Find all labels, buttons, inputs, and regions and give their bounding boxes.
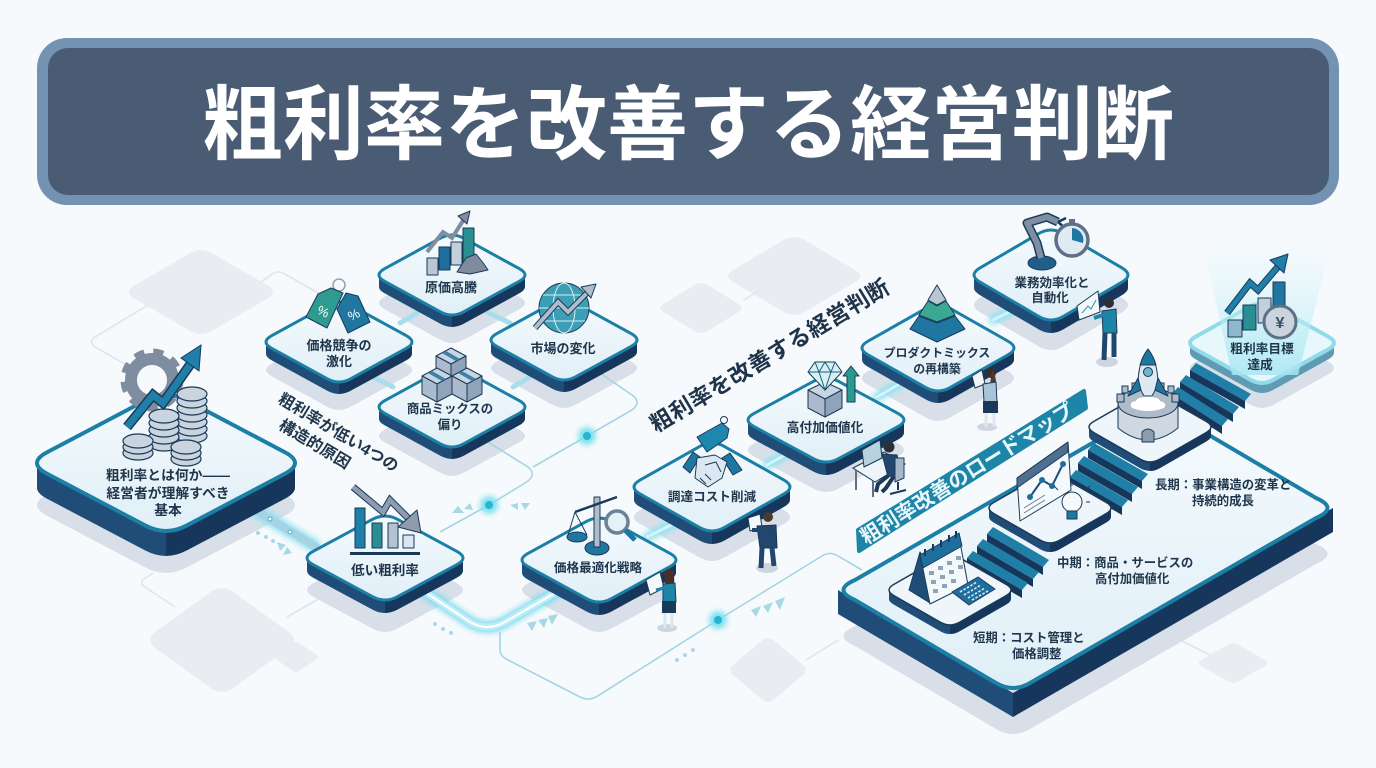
glowing connector: foundation to low margin	[245, 502, 318, 548]
background decorative tiles	[92, 237, 1267, 702]
label: rising cost: 原価高騰	[425, 280, 477, 295]
icon: chart screen	[1017, 442, 1071, 521]
panel: high added value	[748, 362, 904, 475]
panel: procurement cost reduction	[634, 416, 790, 544]
platform ground shadows	[37, 260, 1334, 734]
icon: rocket and castle	[1117, 349, 1179, 442]
label: procurement cost reduction: 調達コスト削減	[668, 489, 756, 504]
person: man with chart panel	[1077, 291, 1118, 367]
icon: stacked boxes	[422, 348, 482, 402]
label: long term: 持続的成長	[1192, 493, 1255, 508]
label: product mix restructuring: の再構築	[913, 362, 961, 376]
flow nodes	[480, 427, 727, 629]
panel: margin goal achieved	[1190, 248, 1334, 393]
icon: pyramid	[910, 285, 965, 342]
label: short term: 価格調整	[1012, 646, 1062, 661]
label: gross margin basics: 経営者が理解すべき	[106, 485, 230, 501]
icon: price tags: %	[315, 302, 332, 321]
label: margin goal achieved: 粗利率目標	[1230, 341, 1294, 356]
glowing connector: low margin to pricing	[422, 590, 560, 627]
person: analyst at desk	[853, 440, 906, 497]
thin teal connector lines	[440, 373, 862, 699]
title banner	[37, 38, 1339, 205]
label: product mix restructuring: プロダクトミックス	[884, 346, 990, 360]
icon: robot arm and stopwatch	[1027, 217, 1088, 270]
icon: price tags: %	[345, 305, 363, 324]
ribbon: roadmap heading: 粗利率改善のロードマップ	[856, 399, 1079, 549]
panel: gross margin basics foundation	[37, 345, 295, 556]
stairs: short to mid term	[967, 527, 1049, 598]
label: low gross margin: 低い粗利率	[351, 563, 419, 578]
panel: skewed product mix	[379, 348, 525, 459]
tier: long term with rocket and castle	[1089, 349, 1211, 471]
label: market change: 市場の変化	[530, 341, 596, 356]
icon: growth chart and yen coin: ¥	[1276, 315, 1285, 332]
title: 粗利率を改善する経営判断	[202, 81, 1174, 171]
panel: efficiency and automation	[974, 217, 1128, 333]
label: efficiency and automation: 業務効率化と	[1014, 275, 1090, 290]
label: pricing optimisation strategy: 価格最適化戦略	[554, 560, 642, 575]
person: man reading document	[748, 512, 778, 573]
icon: calendar	[909, 531, 968, 604]
label: margin goal achieved: 達成	[1247, 357, 1273, 372]
panel: product mix restructuring	[862, 285, 1014, 403]
heading: four structural causes: 構造的原因	[276, 415, 354, 473]
heading: four structural causes: 粗利率が低い4つの	[275, 391, 401, 476]
label: mid term: 中期：商品・サービスの	[1057, 555, 1193, 570]
label: intensifying price competition: 価格競争の	[306, 338, 372, 353]
flow arrowheads and dots	[256, 503, 785, 662]
panel: pricing optimisation	[522, 497, 676, 615]
label: gross margin basics: 基本	[154, 502, 182, 518]
label: skewed product mix: 商品ミックスの	[407, 401, 493, 416]
glowing connectors between steps and causes	[373, 310, 1013, 537]
icon: scales and magnifier	[567, 497, 635, 555]
label: skewed product mix: 偏り	[438, 418, 462, 432]
label: mid term: 高付加価値化	[1095, 571, 1170, 586]
person: woman with board	[646, 569, 677, 632]
label: gross margin basics: 粗利率とは何か——	[106, 467, 230, 483]
icon: gear, growth arrow and coins	[123, 345, 207, 466]
icon: growth chart and yen coin	[1227, 254, 1296, 338]
icon: gem on box with arrow	[808, 362, 859, 417]
icon: cost bars and raw material	[427, 211, 488, 275]
icon: globe and arrow	[535, 283, 596, 333]
label: efficiency and automation: 自動化	[1031, 290, 1069, 305]
tier: mid term with chart and light bulb	[989, 442, 1111, 552]
stairs: mid to long term	[1070, 443, 1148, 515]
stairs: long term to goal	[1172, 363, 1251, 434]
panel: roadmap base	[838, 349, 1333, 717]
panel: market change	[491, 283, 637, 392]
panel: rising cost	[379, 211, 525, 327]
icon: calculator	[952, 577, 995, 605]
label: intensifying price competition: 激化	[326, 354, 352, 369]
panel: low gross margin	[307, 487, 463, 613]
panel: intensifying price competition	[266, 279, 412, 394]
label: short term: 短期：コスト管理と	[973, 630, 1085, 645]
glow beam	[1204, 248, 1330, 375]
icon: handshake and tag	[683, 416, 742, 487]
heading: management decisions to improve margin: 粗利率を改善する経営判断	[646, 274, 894, 437]
person: woman with tablet	[972, 368, 998, 431]
tier: short term with calendar and calculator	[889, 531, 1011, 634]
icon: light bulb	[1054, 482, 1090, 519]
label: long term: 長期：事業構造の変革と	[1155, 477, 1291, 492]
icon: price tags	[306, 279, 370, 333]
icon: falling bars	[350, 487, 421, 555]
label: high added value: 高付加価値化	[787, 420, 864, 435]
